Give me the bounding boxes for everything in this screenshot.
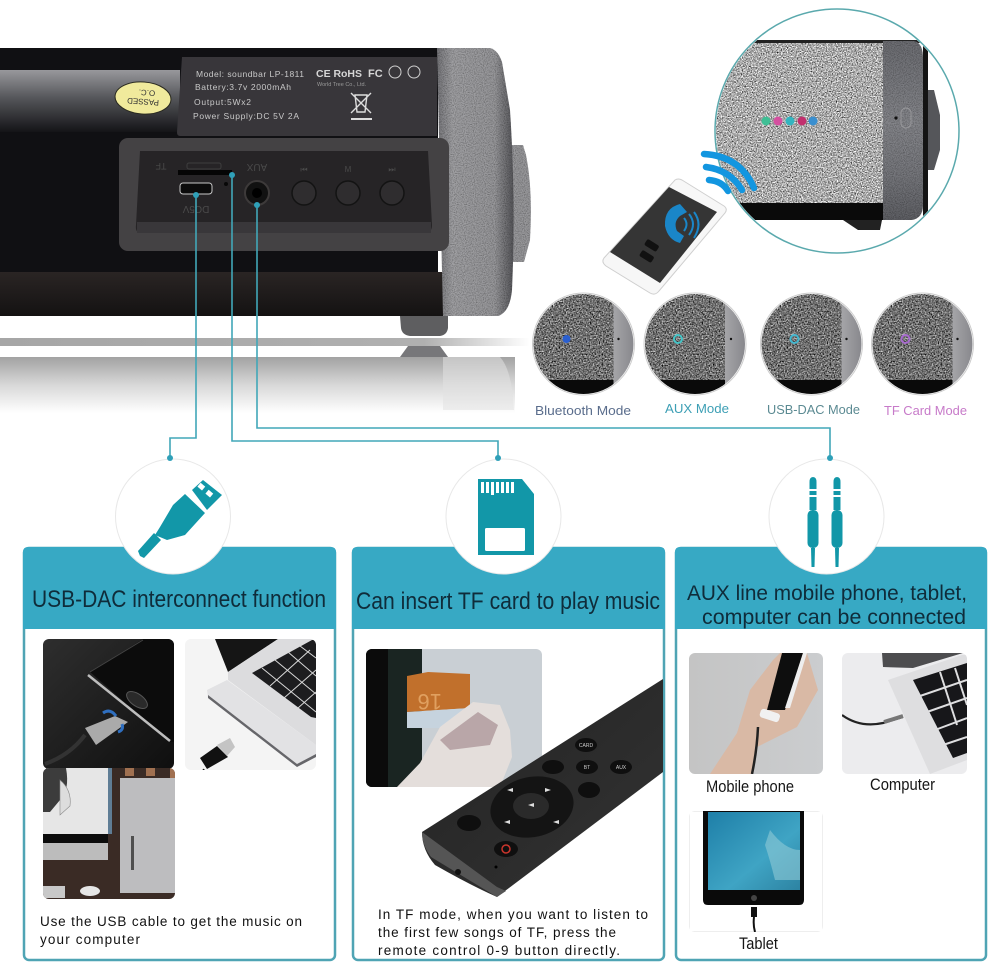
soundbar rear photo: [0, 48, 531, 413]
panel: TF card: [352, 547, 665, 960]
specification label: World Tree Co., Ltd.: [317, 82, 367, 88]
heading: Can insert TF card to play music: [356, 588, 660, 615]
floor reflection: [0, 338, 530, 413]
port panel: ⏭: [388, 165, 396, 174]
port panel: ⏮: [300, 165, 308, 174]
port panel: DC5V: [182, 203, 209, 214]
badge: SD card icon: [446, 459, 561, 574]
device labels: [706, 775, 935, 953]
specification label: CE RoHS: [316, 68, 362, 80]
lower body band: [0, 272, 445, 316]
port panel: TF: [155, 161, 166, 171]
AUX line: [257, 205, 830, 458]
port panel: [119, 138, 449, 251]
body highlight: [0, 70, 180, 132]
specification label: FC: [368, 68, 383, 80]
mode labels: AUX Mode: [665, 401, 729, 416]
specification label: Power Supply:DC 5V 2A: [193, 111, 299, 121]
QC sticker: O.C.: [138, 87, 155, 98]
remote control: [422, 679, 663, 897]
heading: [687, 582, 967, 629]
photo: computer: [842, 653, 967, 774]
QC sticker: [114, 80, 172, 116]
mode circle: USB-DAC: [760, 292, 864, 396]
photo: tablet: [689, 811, 823, 932]
panel frame: [676, 548, 986, 960]
remote control: CARD: [579, 743, 593, 749]
side knob: [510, 145, 531, 262]
LEDs: [762, 116, 818, 126]
description: remote control 0-9 button directly.: [378, 943, 620, 958]
description: the first few songs of TF, press the: [378, 925, 616, 940]
d-pad: [485, 769, 579, 845]
device labels: Tablet: [739, 934, 778, 953]
specification label: [177, 57, 437, 136]
zoom circle: front of soundbar: [700, 9, 959, 253]
mode labels: Bluetooth Mode: [535, 403, 631, 418]
mode labels: TF Card Mode: [884, 403, 967, 418]
remote control: BT: [584, 765, 590, 771]
mode labels: USB-DAC Mode: [767, 402, 860, 417]
specification label: Battery:3.7v 2000mAh: [195, 82, 291, 92]
description: Use the USB cable to get the music on: [40, 914, 302, 929]
port panel: M: [345, 165, 352, 174]
connector dots: [167, 172, 833, 461]
black strip: [725, 203, 883, 220]
photo: mobile phone: [689, 653, 823, 774]
mode labels: [535, 401, 967, 418]
panel header: [23, 547, 336, 629]
USB line: [170, 195, 196, 458]
remote buttons: [575, 738, 597, 752]
description: your computer: [40, 932, 140, 947]
icon: wireless waves: [704, 154, 754, 191]
panel: USB-DAC: [23, 547, 336, 960]
photo: USB plugged into phone: [43, 639, 174, 769]
metal end cap: [437, 48, 514, 316]
side control: [928, 90, 940, 170]
phone: [603, 179, 726, 294]
mode circle: Bluetooth: [532, 292, 636, 396]
heading: USB-DAC interconnect function: [32, 586, 326, 613]
panel: AUX: [675, 547, 987, 960]
description: In TF mode, when you want to listen to: [378, 907, 648, 922]
description: [378, 907, 648, 958]
remote control: AUX: [616, 765, 627, 771]
right black edge: [923, 45, 928, 217]
panel header: [675, 547, 987, 629]
QC sticker: PASSED: [127, 96, 159, 107]
mode circle: AUX: [644, 292, 747, 396]
device labels: Mobile phone: [706, 777, 794, 796]
fabric: [700, 43, 883, 203]
description: [40, 914, 302, 947]
black top edge: [754, 40, 920, 43]
specification label: Output:5Wx2: [194, 97, 251, 107]
black body: [0, 48, 438, 316]
photo: desktop computer: [43, 768, 175, 899]
panel frame: [24, 548, 335, 960]
mode circle: TF card: [872, 292, 974, 396]
port panel: AUX: [246, 161, 267, 172]
TF line: [232, 175, 498, 458]
heading: AUX line mobile phone, tablet,: [687, 582, 967, 605]
photo: inserting TF card: [366, 649, 542, 787]
connector lines: [170, 175, 830, 458]
photo: inserting TF card: 16: [418, 689, 442, 714]
photo: USB hub on laptop: [185, 639, 316, 778]
badge: USB icon: [116, 459, 230, 574]
panel frame: [353, 548, 664, 960]
specification label: Model: soundbar LP-1811: [196, 69, 304, 79]
phone call icon: [665, 204, 698, 243]
heading: computer can be connected: [702, 606, 966, 629]
rubber foot: [400, 316, 448, 336]
badge: AUX cable icon: [769, 459, 884, 574]
metal cap: [883, 41, 923, 220]
device labels: Computer: [870, 775, 935, 794]
panel header: [352, 547, 665, 629]
